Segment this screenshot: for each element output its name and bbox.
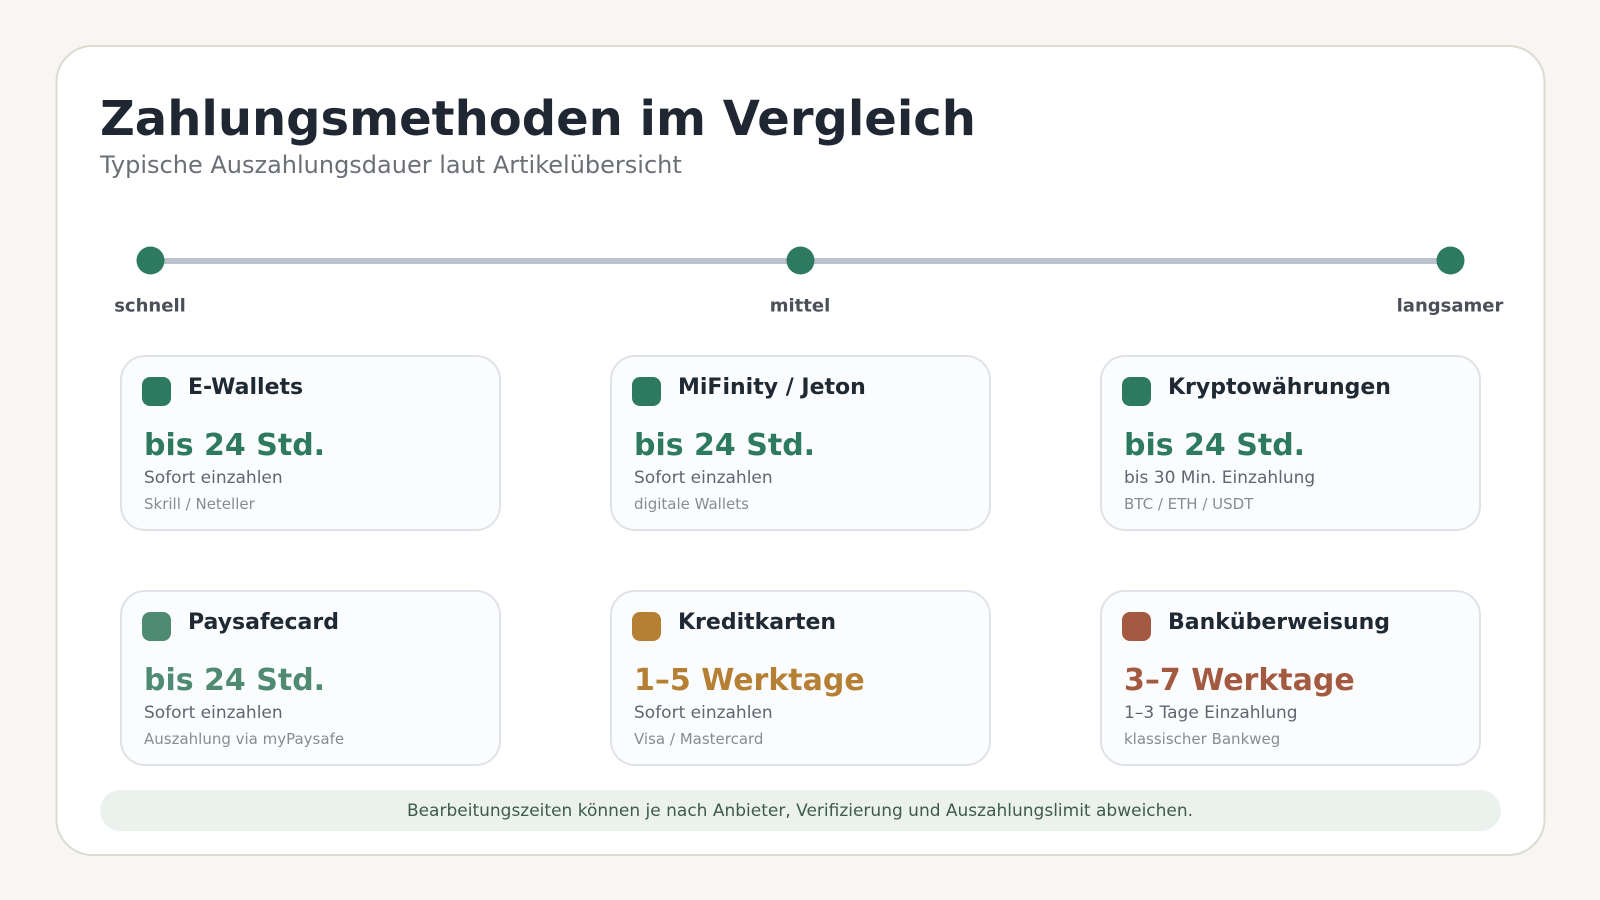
provider note: Skrill / Neteller [144, 495, 256, 513]
payout time: bis 24 Std. [1124, 428, 1305, 463]
provider note: Auszahlung via myPaysafe [144, 730, 344, 748]
card title: Paysafecard [188, 610, 339, 635]
deposit info: bis 30 Min. Einzahlung [1124, 468, 1315, 488]
subtitle: Typische Auszahlungsdauer laut Artikelübersicht [99, 151, 682, 179]
payout time: 3–7 Werktage [1124, 663, 1355, 698]
marker: schnell [136, 246, 164, 274]
card title: Banküberweisung [1168, 610, 1390, 635]
provider note: BTC / ETH / USDT [1124, 495, 1254, 513]
speed timeline [114, 246, 1503, 316]
provider note: Visa / Mastercard [634, 730, 763, 748]
card: Kryptowährungen [1101, 356, 1480, 530]
card title: Kryptowährungen [1168, 375, 1391, 400]
icon: E-Wallets [142, 377, 171, 406]
card title: E-Wallets [188, 375, 303, 400]
deposit info: Sofort einzahlen [634, 468, 773, 488]
icon: Kreditkarten [632, 612, 661, 641]
marker: mittel [786, 246, 814, 274]
deposit info: Sofort einzahlen [144, 468, 283, 488]
card: E-Wallets [121, 356, 500, 530]
icon: Banküberweisung [1122, 612, 1151, 641]
card: Kreditkarten [611, 591, 990, 765]
marker: langsamer [1436, 246, 1464, 274]
payout time: bis 24 Std. [634, 428, 815, 463]
label: langsamer: langsamer [1397, 296, 1503, 316]
card: MiFinity / Jeton [611, 356, 990, 530]
icon: Paysafecard [142, 612, 171, 641]
card title: Kreditkarten [678, 610, 836, 635]
deposit info: Sofort einzahlen [144, 703, 283, 723]
footer note: Bearbeitungszeiten können je nach Anbieter, Verifizierung und Auszahlungslimit abweichen. [407, 801, 1193, 821]
card: Paysafecard [121, 591, 500, 765]
deposit info: Sofort einzahlen [634, 703, 773, 723]
card title: MiFinity / Jeton [678, 375, 866, 400]
footer note [100, 790, 1501, 831]
provider note: digitale Wallets [634, 495, 749, 513]
icon: MiFinity [632, 377, 661, 406]
card: Banküberweisung [1101, 591, 1480, 765]
payout time: bis 24 Std. [144, 663, 325, 698]
payout time: 1–5 Werktage [634, 663, 865, 698]
icon: Krypto [1122, 377, 1151, 406]
label: mittel: mittel [770, 296, 830, 316]
title: Zahlungsmethoden im Vergleich [100, 91, 976, 147]
payout time: bis 24 Std. [144, 428, 325, 463]
label: schnell: schnell [114, 296, 186, 316]
provider note: klassischer Bankweg [1124, 730, 1280, 748]
deposit info: 1–3 Tage Einzahlung [1124, 703, 1298, 723]
